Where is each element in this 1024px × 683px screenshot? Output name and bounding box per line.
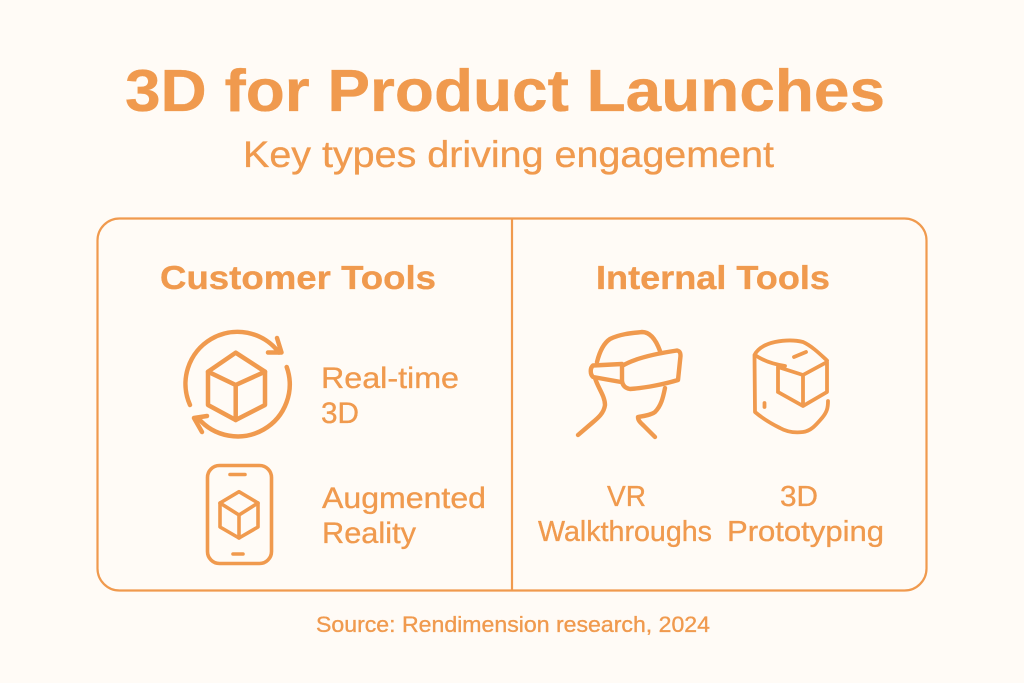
panel: customer tools <box>160 259 486 564</box>
label: real-time 3D: 3D <box>321 397 359 430</box>
subtitle: Key types driving engagement <box>243 134 775 175</box>
heading: internal tools: Internal Tools <box>596 259 830 296</box>
panel: tools container <box>98 218 926 590</box>
label: 3D prototyping: 3D <box>780 481 818 513</box>
label: VR walkthroughs: Walkthroughs <box>538 516 712 548</box>
source note: Source: Rendimension research, 2024 <box>316 612 710 637</box>
icon: rotating 3D cube <box>185 332 290 436</box>
icon: VR headset on head <box>578 332 680 437</box>
label: VR walkthroughs: VR <box>607 481 646 513</box>
label: 3D prototyping: Prototyping <box>727 516 884 548</box>
icon: phone with cube <box>208 466 272 564</box>
title: 3D for Product Launches <box>125 58 885 124</box>
label: real-time 3D: Real-time <box>321 362 459 395</box>
icon: 3D prototyping cube <box>754 340 828 432</box>
panel: internal tools <box>538 259 884 548</box>
label: augmented reality: Reality <box>322 517 416 550</box>
heading: customer tools: Customer Tools <box>160 259 436 296</box>
label: augmented reality: Augmented <box>322 482 486 515</box>
